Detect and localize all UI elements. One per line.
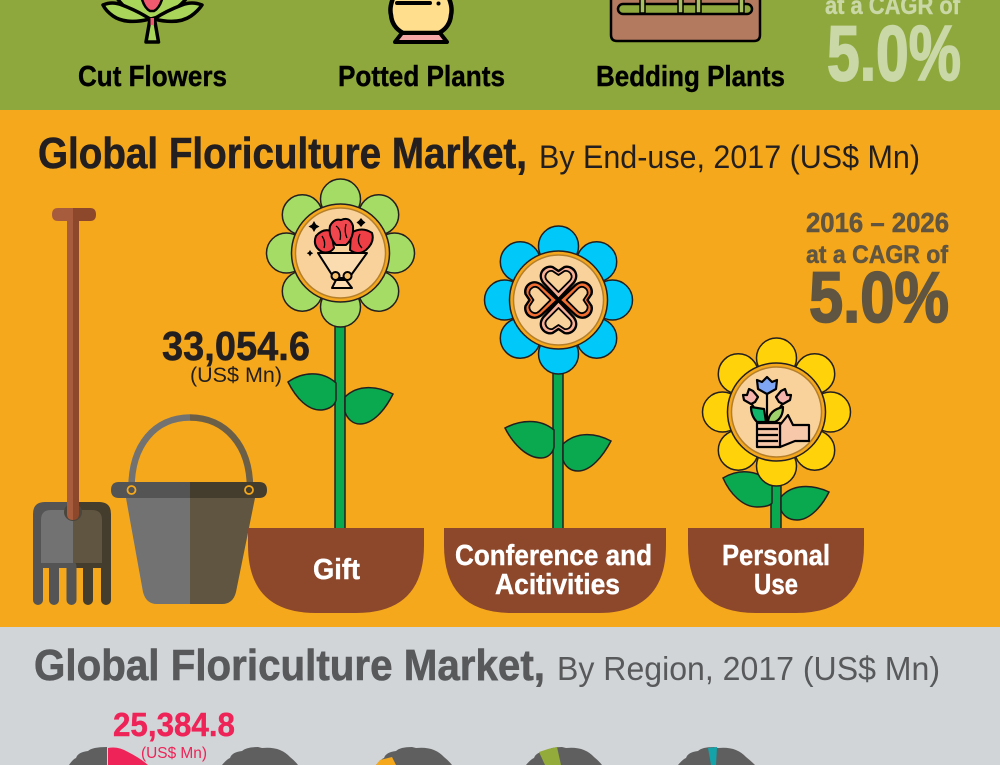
heading: end-use: By End-use, 2017 (US$ Mn) bbox=[539, 139, 920, 175]
heading: region: Global Floriculture Market, bbox=[34, 641, 545, 690]
callout: orange cagr: 5.0% bbox=[809, 259, 949, 338]
chart: pie 3 bbox=[376, 747, 452, 765]
label: cut flowers: Cut Flowers bbox=[78, 61, 227, 93]
heading: end-use bbox=[38, 129, 920, 178]
panel: by region bbox=[0, 627, 1000, 765]
icon: potted plant bbox=[390, 0, 452, 42]
flower: conference bbox=[484, 226, 632, 530]
panel: product types bbox=[0, 0, 1000, 110]
chart: pie 5 bbox=[678, 747, 755, 765]
heading: region bbox=[34, 641, 940, 690]
callout: orange cagr bbox=[806, 207, 949, 338]
pot: conference and activities bbox=[444, 528, 666, 613]
heading: region: By Region, 2017 (US$ Mn) bbox=[557, 650, 940, 687]
flower: personal use bbox=[702, 338, 850, 530]
chart: pie 2 bbox=[222, 747, 298, 765]
pot: personal use: Personal bbox=[722, 540, 830, 572]
value: leading region: 25,384.8 bbox=[113, 706, 235, 743]
icon: rose bouquet bbox=[307, 218, 373, 288]
value: gift bbox=[162, 323, 310, 387]
icon: four hearts bbox=[525, 267, 592, 333]
pot: gift bbox=[248, 528, 424, 613]
label: potted plants: Potted Plants bbox=[338, 61, 505, 93]
icon: cut flower bbox=[103, 0, 202, 42]
value: leading region bbox=[113, 706, 235, 762]
panel: by end-use bbox=[0, 110, 1000, 627]
pot: personal use: Use bbox=[754, 569, 798, 601]
chart: pie 1 bbox=[69, 747, 148, 765]
callout: top cagr: 5.0% bbox=[827, 9, 961, 97]
value: gift: (US$ Mn) bbox=[190, 364, 282, 387]
callout: orange cagr: at a CAGR of bbox=[806, 241, 949, 269]
icon: bedding plant tray bbox=[611, 0, 760, 41]
flower: gift bbox=[266, 179, 414, 530]
pot: conference and activities: Acitivities bbox=[495, 569, 620, 601]
icon: garden fork bbox=[33, 208, 111, 600]
pot: gift: Gift bbox=[313, 554, 360, 586]
icon: hand holding flowers bbox=[743, 377, 809, 447]
pot: personal use bbox=[688, 528, 864, 613]
label: bedding plants: Bedding Plants bbox=[596, 61, 785, 93]
heading: end-use: Global Floriculture Market, bbox=[38, 129, 527, 178]
icon: bucket bbox=[111, 418, 267, 604]
callout: orange cagr: 2016 – 2026 bbox=[806, 207, 949, 238]
value: gift: 33,054.6 bbox=[162, 323, 310, 369]
pot: conference and activities: Conference and bbox=[455, 540, 652, 572]
value: leading region: (US$ Mn) bbox=[141, 745, 207, 762]
chart: pie 4 bbox=[526, 747, 602, 765]
